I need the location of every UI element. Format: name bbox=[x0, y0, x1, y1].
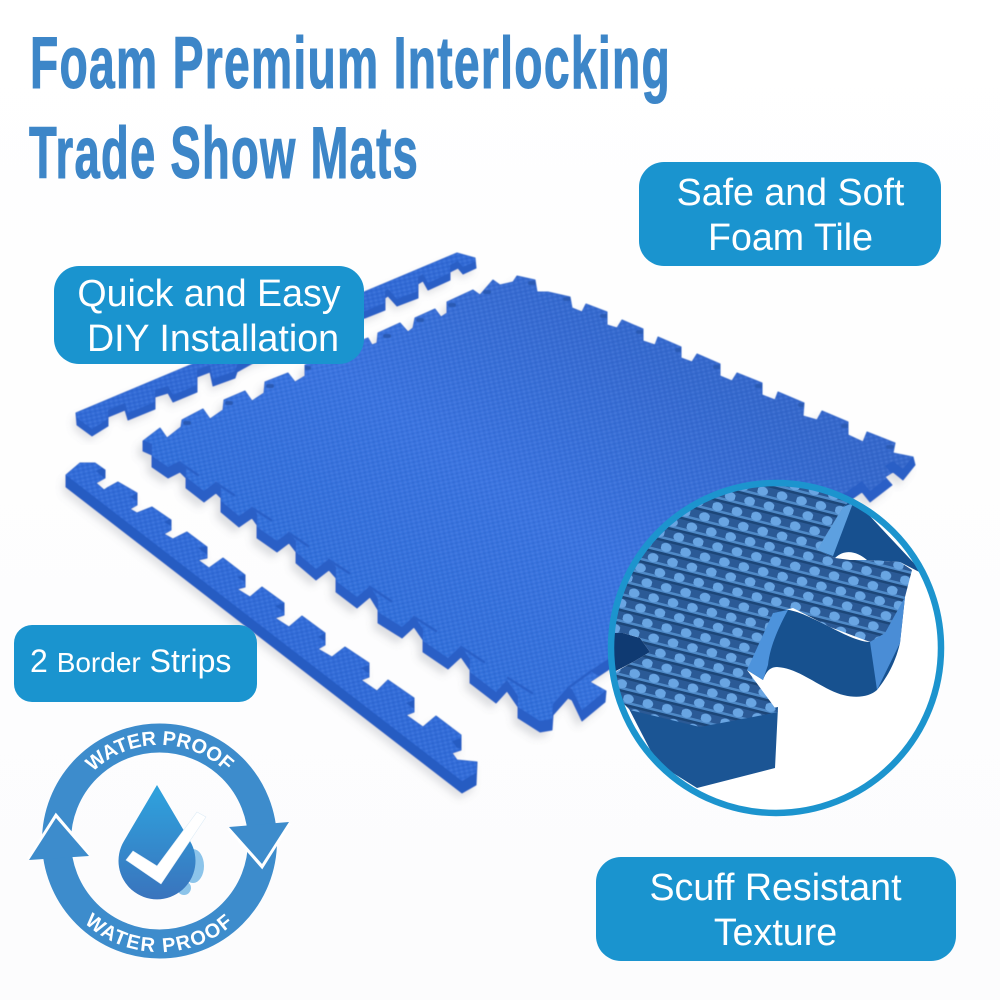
label: quick and easy: Quick and Easy bbox=[77, 272, 341, 314]
label: safe and soft: Foam Tile bbox=[708, 216, 873, 258]
icon: water drop with check mark bbox=[118, 785, 206, 899]
water proof badge bbox=[29, 724, 289, 958]
label: safe and soft bbox=[639, 162, 941, 266]
zoom circle: scuff resistant texture close-up bbox=[600, 470, 941, 813]
water proof badge: WATER PROOF bbox=[84, 731, 235, 770]
dark interlock hole at left bbox=[614, 633, 650, 671]
label: quick and easy bbox=[54, 266, 364, 364]
title: Trade Show Mats bbox=[29, 113, 419, 194]
label: quick and easy: DIY Installation bbox=[87, 317, 339, 359]
label: scuff resistant: Scuff Resistant bbox=[649, 866, 902, 908]
label: scuff resistant bbox=[596, 857, 956, 961]
label: 2 border strips bbox=[14, 625, 257, 702]
upper border strip bbox=[73, 246, 476, 441]
label: scuff resistant: Texture bbox=[714, 911, 837, 953]
label: 2 border strips: 2 Border Strips bbox=[30, 643, 231, 679]
foam mat tile bbox=[138, 265, 915, 738]
title bbox=[29, 23, 671, 194]
water proof badge: WATER PROOF bbox=[86, 912, 230, 952]
lower border strip bbox=[63, 451, 477, 799]
label: safe and soft: Safe and Soft bbox=[677, 171, 905, 213]
